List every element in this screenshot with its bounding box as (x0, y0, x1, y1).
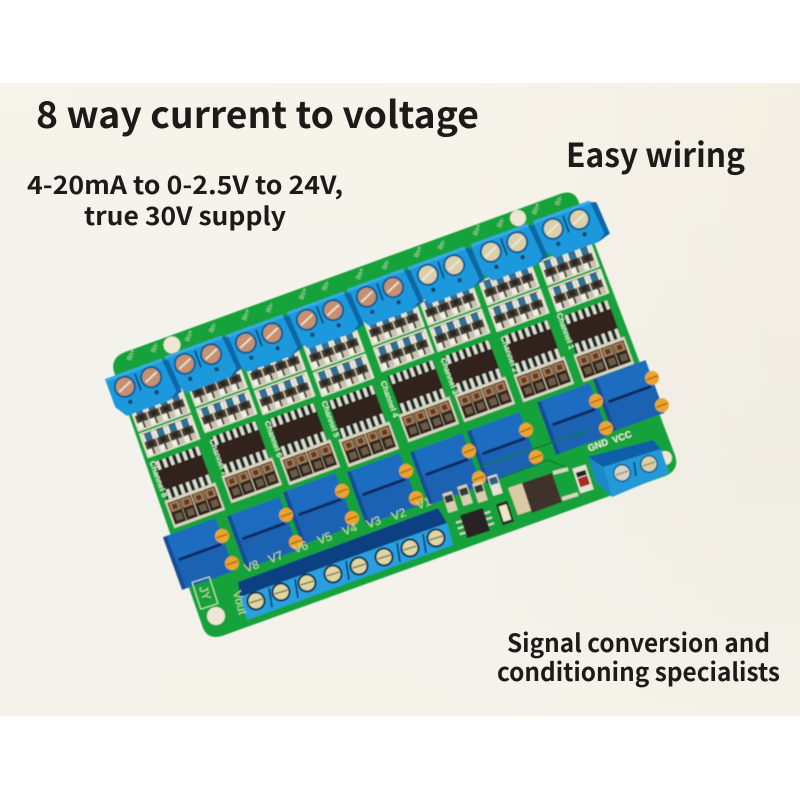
callout: specialists: conditioning specialists (497, 653, 780, 689)
input labels along top edge: IIn+ (184, 329, 195, 343)
input labels along top edge: IIn+ (126, 348, 137, 362)
regulator IC (508, 469, 578, 515)
input labels along top edge: IIn- (208, 321, 219, 334)
GND and VCC labels (586, 429, 634, 454)
mounting holes (164, 210, 672, 625)
channel silkscreen labels: Channel 2 (499, 335, 520, 374)
callout: easy wiring: Easy wiring (566, 129, 745, 177)
photo background (0, 83, 800, 716)
output labels V8 to V1: V2 (389, 505, 408, 523)
small SMD parts (442, 464, 594, 525)
callout: specialists: Signal conversion and (507, 624, 770, 660)
channel silkscreen labels: Channel 8 (148, 460, 169, 499)
subtitle: current and voltage ranges: 4-20mA to 0-2.5V to 24V, (27, 166, 343, 202)
input labels along top edge: IIn+ (413, 245, 424, 259)
input labels along top edge: IIn- (496, 216, 507, 229)
output labels V8 to V1: V3 (364, 513, 383, 531)
input labels along top edge: IIn+ (531, 202, 542, 216)
JY logo box (192, 577, 218, 609)
output labels V8 to V1: V4 (340, 520, 359, 538)
trim potentiometers (163, 358, 671, 590)
channel silkscreen labels: Channel 5 (320, 400, 341, 439)
channel silkscreen labels: Channel 7 (208, 438, 229, 477)
GND and VCC labels: GND (586, 437, 610, 454)
channel silkscreen labels: Channel 4 (379, 380, 400, 419)
input labels along top edge: IIn- (321, 279, 332, 292)
channel silkscreen labels: Channel 3 (439, 357, 460, 396)
power regulator section (442, 429, 669, 540)
input labels along top edge: IIn- (437, 238, 448, 251)
title: 8 way current to voltage (36, 85, 479, 139)
input labels along top edge: IIn- (381, 258, 392, 271)
GND and VCC labels: VCC (611, 429, 634, 446)
output labels V8 to V1: V5 (315, 529, 334, 547)
channel silkscreen labels: Channel 6 (263, 420, 284, 459)
channel silkscreen labels (148, 312, 576, 499)
output labels V8 to V1: V6 (291, 538, 310, 556)
output labels V8 to V1: V8 (242, 557, 261, 575)
small op-amp IC (454, 506, 496, 540)
output labels V8 to V1: V1 (414, 494, 433, 512)
input labels along top edge (126, 194, 565, 362)
input labels along top edge: IIn+ (355, 267, 366, 281)
input labels along top edge: IIn- (150, 341, 161, 354)
channel circuits: resistors and op-amps (129, 242, 635, 529)
subtitle: current and voltage ranges (27, 166, 343, 233)
output terminal block (238, 508, 453, 620)
input terminal blocks (105, 198, 611, 419)
Vout label: Vout (230, 589, 250, 617)
output labels V8 to V1 (242, 494, 433, 575)
callout: specialists (497, 624, 780, 689)
input labels along top edge: IIn+ (241, 308, 252, 322)
input labels along top edge: IIn+ (472, 223, 483, 237)
channel silkscreen labels: Channel 1 (555, 312, 576, 351)
board: green PCB (113, 192, 676, 637)
input labels along top edge: IIn- (554, 194, 565, 207)
power terminal block (588, 440, 669, 497)
output labels V8 to V1: V7 (266, 548, 285, 566)
input labels along top edge: IIn+ (298, 287, 309, 301)
subtitle: current and voltage ranges: true 30V supply (84, 197, 287, 233)
input labels along top edge: IIn- (265, 301, 276, 314)
circuit board module (105, 192, 676, 637)
JY logo box: JY (196, 584, 214, 602)
